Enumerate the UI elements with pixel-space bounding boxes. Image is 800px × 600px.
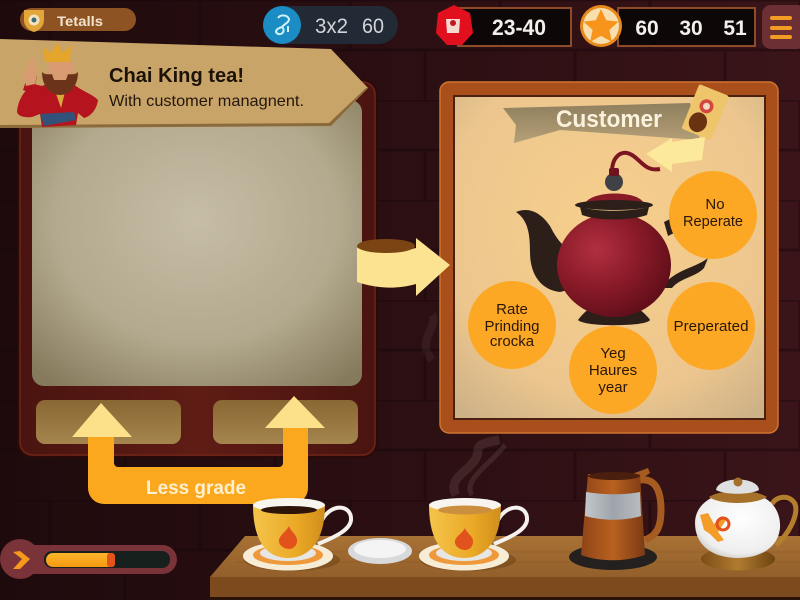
callout: No Reperate: No	[705, 196, 725, 213]
callout: Preperated: Preperated	[674, 318, 748, 335]
badge: Tetalls: Tetalls	[57, 13, 103, 29]
score box: 60 30 51: 51	[723, 17, 747, 40]
callout: Yeg Haures year: Haures	[589, 362, 637, 379]
button slot left	[36, 400, 181, 444]
score box: 60 30 51	[580, 5, 755, 47]
callout: Yeg Haures year: Yeg	[600, 345, 626, 362]
arrow: less grade U arrow	[72, 396, 325, 504]
callout: Rate Prinding crocka: crocka	[490, 333, 535, 350]
score box: 23-40	[436, 5, 571, 46]
icon: king character	[17, 43, 98, 127]
icon: copper mug	[569, 468, 661, 570]
callout: Rate Prinding crocka	[468, 281, 556, 369]
badge: Tetalls	[20, 8, 136, 32]
icon: red teapot	[516, 153, 708, 325]
callout: Rate Prinding crocka: Rate	[496, 301, 528, 318]
steam	[426, 315, 505, 495]
banner: Chai King tea: Chai King tea!	[109, 65, 244, 87]
callout: Preperated	[667, 282, 755, 370]
arrow: small cream arrow	[646, 137, 705, 172]
screen area	[32, 100, 362, 386]
banner: Chai King tea: With customer managnent.	[109, 93, 304, 110]
score box: 60 30 51: 60	[635, 17, 659, 40]
arrow: less grade U arrow: Less grade	[146, 478, 246, 499]
icon: red shield	[436, 5, 473, 45]
icon: tea cup milky	[419, 498, 527, 571]
stat pill: 3x2 60	[263, 6, 398, 44]
score box: 23-40: 23-40	[492, 15, 546, 40]
arrow: big cream arrow to customer panel	[357, 238, 450, 296]
callout: No Reperate: Reperate	[683, 213, 743, 230]
stat pill: 3x2 60: 3x2	[315, 15, 348, 38]
menu button	[762, 5, 800, 49]
panel: left frame	[18, 80, 377, 457]
panel: customer frame	[440, 82, 778, 433]
progress bar	[0, 539, 177, 579]
table	[210, 536, 800, 600]
icon: tea packet	[681, 84, 729, 140]
button slot right	[213, 400, 358, 444]
callout: Yeg Haures year: year	[598, 379, 628, 396]
score box: 60 30 51: 30	[679, 17, 703, 40]
banner: Chai King tea	[0, 39, 368, 128]
icon: star medal	[580, 5, 622, 47]
icon: white plate	[348, 538, 412, 564]
banner: Customer heading	[503, 103, 700, 143]
callout: Yeg Haures year	[569, 326, 657, 414]
callout: No Reperate	[669, 171, 757, 259]
callout: Rate Prinding crocka: Prinding	[484, 318, 540, 335]
icon: white teapot	[695, 478, 796, 570]
icon: tea cup dark	[243, 498, 351, 571]
stat pill: 3x2 60: 60	[362, 15, 384, 38]
banner: Customer heading: Customer	[556, 106, 662, 133]
